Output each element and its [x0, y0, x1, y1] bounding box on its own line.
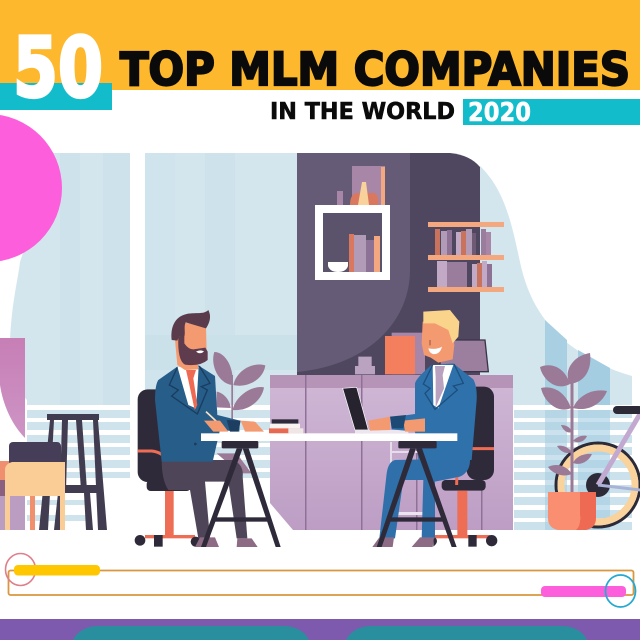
- shoes: [372, 537, 394, 547]
- trousers: [162, 460, 247, 538]
- plant behind desk left: [213, 352, 265, 473]
- jacket: [391, 363, 477, 460]
- nose line: [429, 340, 431, 345]
- man left: [135, 310, 264, 547]
- hair: [171, 310, 210, 341]
- pink bar: [541, 586, 626, 597]
- table: [201, 433, 457, 547]
- yellow bar: [14, 565, 100, 576]
- scene people group, drawn at 3x: [135, 310, 497, 547]
- pink circle: [0, 114, 62, 262]
- potted plant right: [540, 353, 607, 530]
- smile: [196, 350, 204, 353]
- dark wall: [297, 153, 480, 380]
- hands: [368, 415, 425, 432]
- hair: [423, 310, 459, 343]
- smile: [428, 347, 442, 354]
- books on table: [269, 419, 303, 433]
- year bar: [463, 99, 640, 125]
- laptop: [343, 387, 408, 433]
- button: [194, 443, 197, 445]
- beard: [178, 337, 208, 365]
- timeline outline: [8, 570, 634, 595]
- timeline decoration: [6, 554, 636, 607]
- wall cube shelf with objects: [315, 166, 390, 280]
- side chair: [0, 442, 65, 530]
- jacket: [155, 365, 240, 462]
- year: 2020: [468, 98, 531, 128]
- lapels: [169, 366, 210, 414]
- right window: [480, 166, 632, 530]
- small printer: [355, 357, 375, 374]
- orange folder and monitor: [385, 333, 488, 374]
- red ring: [6, 554, 36, 586]
- subtitle: IN THE WORLD: [270, 97, 455, 125]
- shirt and tie: [177, 367, 199, 410]
- bicycle: [556, 406, 640, 527]
- neck and face: [422, 322, 454, 363]
- chair right: [433, 387, 497, 547]
- footer band: [0, 619, 640, 640]
- chair left: [135, 389, 201, 547]
- neck and face: [175, 322, 207, 370]
- blue ring: [606, 575, 636, 607]
- trousers: [379, 458, 470, 538]
- illustration: office scene: [0, 114, 640, 547]
- number 50: 50: [13, 20, 103, 116]
- header band: [0, 0, 640, 90]
- lapels: [423, 364, 463, 409]
- shirt and tie: [433, 365, 453, 408]
- man right: [368, 310, 497, 547]
- curtain: [0, 338, 25, 438]
- middle window: [130, 153, 300, 493]
- stool: [39, 414, 107, 530]
- teal footer pill left: [72, 626, 310, 640]
- wall bookshelves: [428, 222, 504, 292]
- teal footer pill right: [345, 626, 588, 640]
- left window: [8, 153, 130, 521]
- cyan tab behind 50: [0, 83, 112, 110]
- pen and hand: [204, 412, 264, 432]
- desk cabinet: [270, 375, 513, 530]
- shoes: [195, 537, 219, 547]
